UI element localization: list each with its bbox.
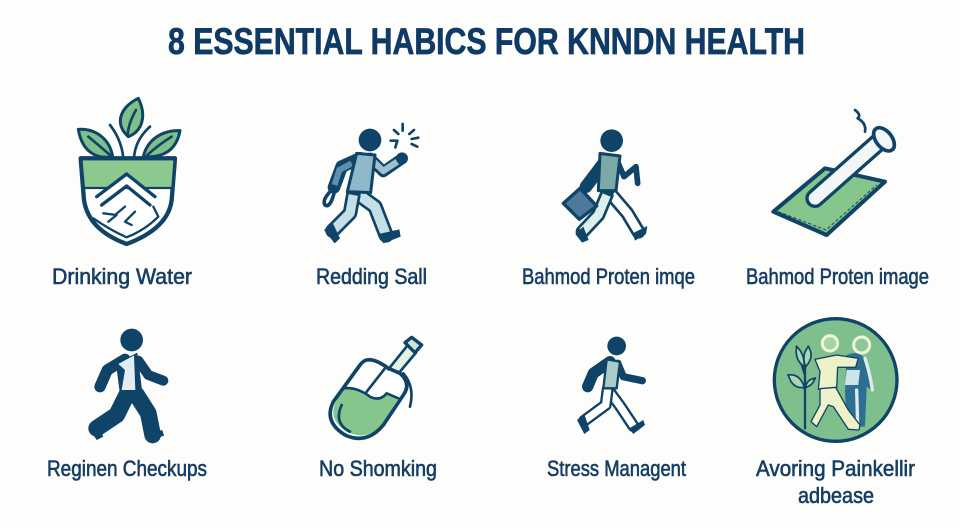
- icon: two people in green circle: [774, 319, 897, 441]
- panel: reducing salt: [316, 124, 427, 289]
- label: reducing salt: Redding Sall: [316, 264, 427, 289]
- panel: avoiding painkiller abuse: [756, 319, 915, 508]
- label: regular checkups: Reginen Checkups: [47, 456, 207, 481]
- label: stress management: Stress Managent: [547, 456, 686, 481]
- title: 8 ESSENTIAL HABICS FOR KNNDN HEALTH: [168, 21, 805, 62]
- icon: walking figure: [577, 337, 645, 434]
- icon: walker with sparks: [324, 124, 418, 243]
- label: avoiding painkiller abuse: Avoring Painkellir: [756, 456, 915, 481]
- label: no smoking: No Shomking: [319, 456, 437, 481]
- panel: balanced protein image: [746, 110, 929, 289]
- icon: walker with briefcase: [563, 129, 647, 243]
- label: balanced protein intake: Bahmod Proten imqe: [522, 264, 695, 289]
- icon: running figure: [88, 329, 164, 441]
- label: balanced protein image: Bahmod Proten image: [746, 264, 929, 289]
- label: avoiding painkiller abuse: [756, 456, 915, 508]
- panel: drinking water: [52, 98, 192, 289]
- panel: regular checkups: [47, 329, 207, 481]
- icon: tube on green mat: [773, 110, 898, 235]
- panel: no smoking: [319, 337, 437, 481]
- label: avoiding painkiller abuse: adbease: [798, 483, 874, 508]
- icon: plant shield: [78, 98, 180, 244]
- panel: stress management: [547, 337, 686, 481]
- panel: balanced protein intake: [522, 129, 695, 289]
- label: drinking water: Drinking Water: [52, 264, 192, 289]
- icon: bottle with green liquid: [330, 337, 422, 438]
